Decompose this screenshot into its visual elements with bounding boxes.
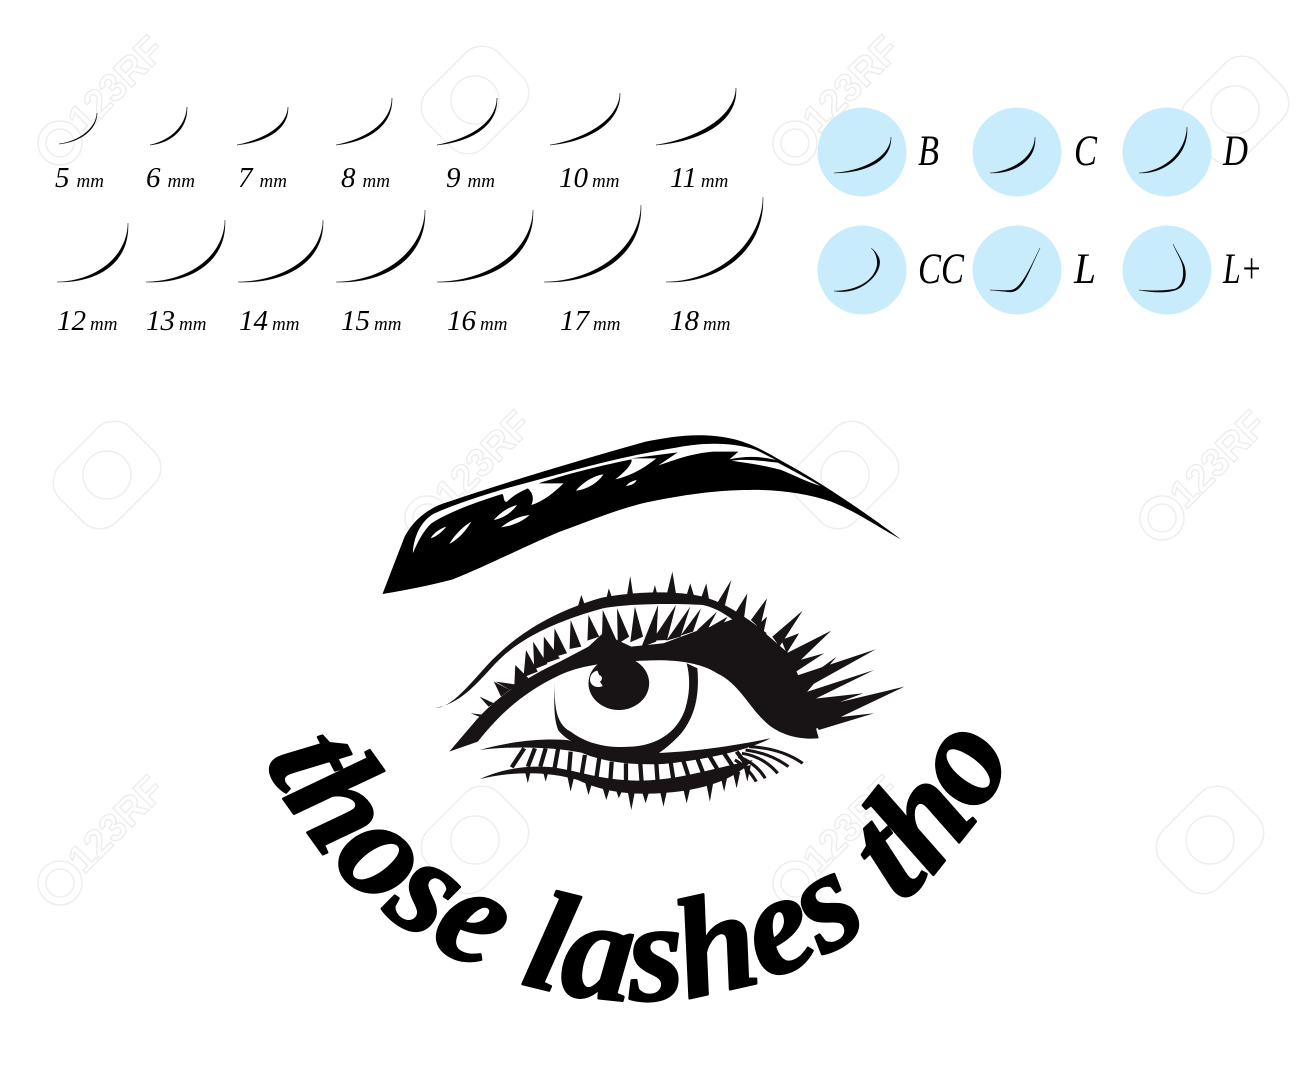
icon: eye [435,572,904,810]
lash: 12 mm [57,223,128,337]
lower lid outer line [480,760,753,794]
watermarks: 123RF [427,403,540,516]
lash: 14 mm: 14mm [239,305,299,337]
curl: D: D [1222,128,1248,175]
lash: 10 mm [550,93,620,194]
lower lid outer fan [735,747,803,782]
lash: 5 mm [55,113,104,194]
lash: 9 mm: 9 mm [446,162,495,194]
curl: CC [818,226,965,314]
lash: 17 mm: 17mm [560,305,620,337]
lash: 9 mm [437,98,497,194]
watermarks: 123RF [60,28,173,141]
lash: 5 mm: 5 mm [55,162,104,194]
curl: L [972,226,1096,314]
watermarks [38,28,1299,905]
pupil [588,657,649,710]
lash: 16 mm: 16mm [447,305,507,337]
lash: 15 mm: 15mm [341,305,401,337]
lash: 6 mm: 6 mm [146,162,195,194]
panel: lash lengths chart [55,88,763,337]
curl: C: C [1074,128,1098,175]
lash: 14 mm [238,220,323,337]
watermarks: 123RF [795,28,908,141]
lash: 11 mm: 11mm [670,162,728,194]
watermarks: 123RF [60,768,173,881]
lash: 18 mm: 18mm [670,305,730,337]
curl: D [1122,108,1248,196]
curl: B [818,108,939,196]
lash: 12 mm: 12mm [57,305,117,337]
lash: 6 mm [146,107,195,194]
curl: CC: CC [918,246,965,293]
curl: L+ [1122,226,1262,314]
pupil highlight [590,671,603,687]
lash: 18 mm [666,197,763,337]
lower lashes [524,765,751,810]
lash: 13 mm [146,220,225,337]
watermarks: 123RF [795,768,908,881]
lash: 7 mm: 7 mm [238,162,287,194]
lower lid inner line [480,738,771,764]
lash: 8 mm: 8 mm [341,162,390,194]
curl: C [972,108,1098,196]
upper lashes [471,572,904,730]
curl: B: B [918,128,939,175]
lower lash teeth [512,748,746,788]
upper lid crease [435,592,767,708]
watermarks: 123RF [1162,403,1275,516]
lash: 15 mm [336,210,425,337]
icon: eyebrow [382,435,901,594]
lash: 11 mm [656,88,736,194]
lash: 7 mm [237,107,288,194]
lash: 13 mm: 13mm [146,305,206,337]
lash: 8 mm [336,98,392,194]
lash: 16 mm [437,210,533,337]
upper lid and lash mass [449,618,819,752]
curved slogan: those lashes tho [268,732,1002,1003]
panel: lash curl types [818,108,1262,314]
curl: L+: L+ [1222,246,1262,293]
iris outline [554,663,698,755]
lash: 17 mm [544,205,641,337]
lash: 10 mm: 10mm [559,162,619,194]
curl: L: L [1073,246,1096,293]
